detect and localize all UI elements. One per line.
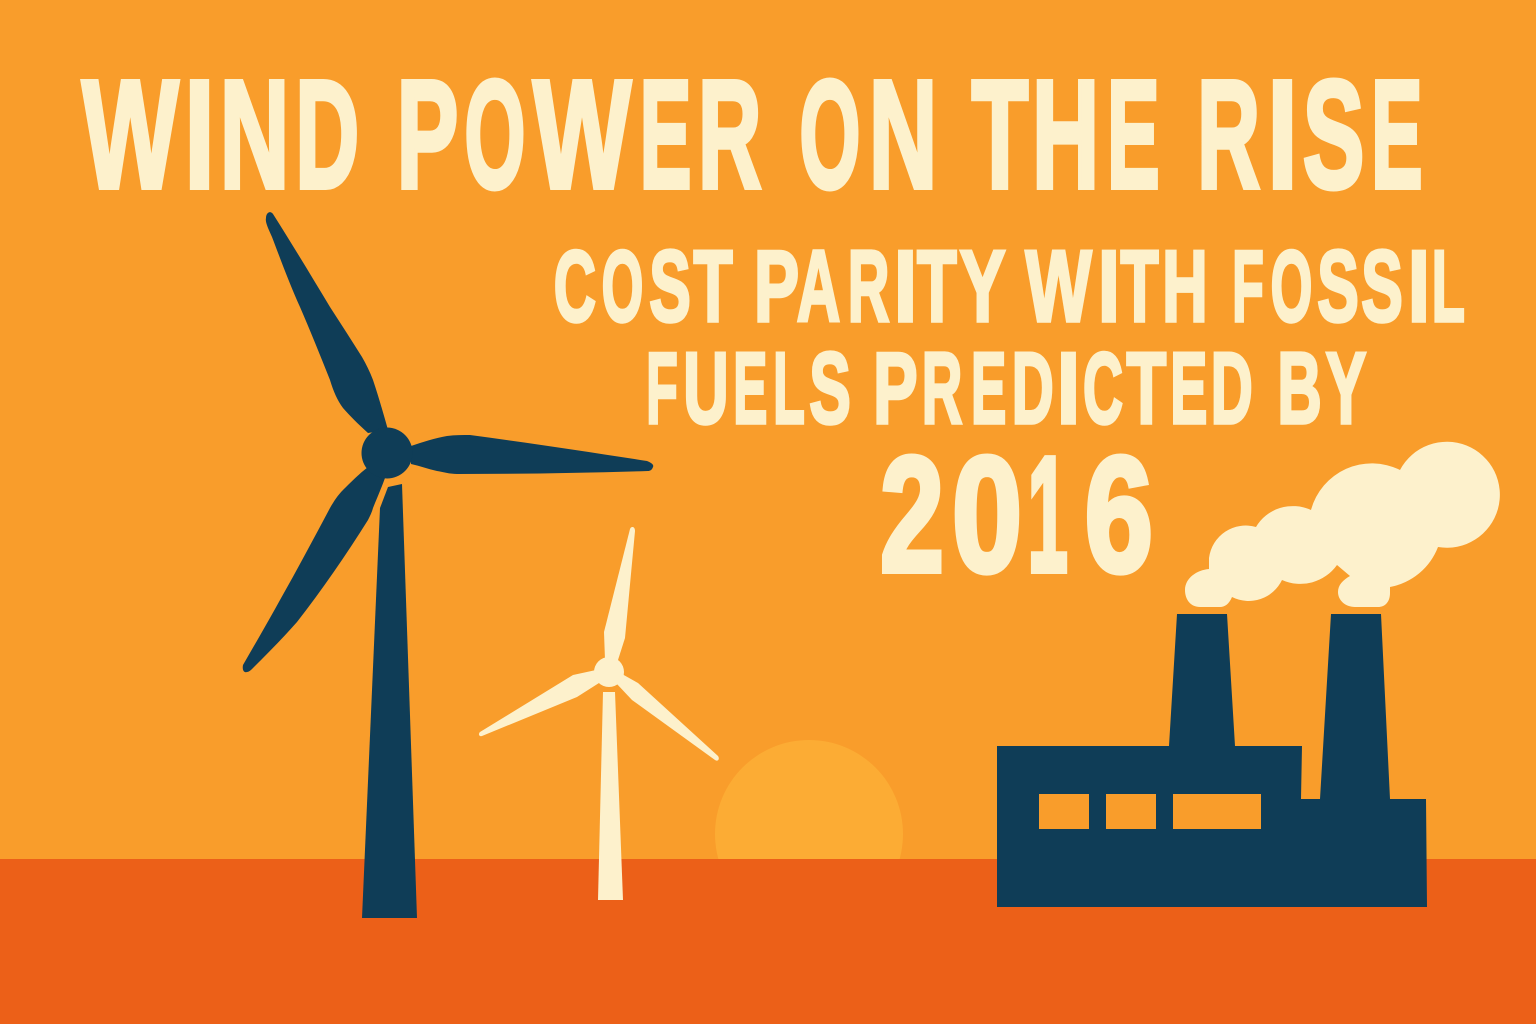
subtitle: A [797,231,840,343]
subtitle: C [554,231,596,343]
subtitle: B [1277,333,1322,445]
title: E [640,48,692,220]
subtitle: Y [960,231,1005,343]
subtitle: I [1408,231,1430,343]
title: I [1267,48,1298,220]
subtitle: F [1232,231,1264,343]
title: R [698,48,762,220]
subtitle: P [873,333,918,445]
title: E [1107,48,1160,220]
title: R [1197,48,1260,220]
title: E [1371,48,1423,220]
subtitle: T [694,231,733,343]
large navy wind turbine [243,212,653,918]
small cream wind turbine [479,527,719,900]
subtitle: L [773,333,805,445]
factory [997,614,1427,907]
subtitle: T [917,231,957,343]
title: S [1303,48,1364,220]
sun [715,740,903,928]
title: D [295,48,359,220]
year 2016: 1 [1028,423,1068,606]
subtitle [554,231,1465,445]
subtitle: I [1098,231,1120,343]
year 2016: 2 [880,423,944,606]
title: I [184,48,215,220]
subtitle: O [1271,231,1312,343]
factory windows [1039,794,1261,829]
subtitle: P [754,231,799,343]
subtitle: S [1317,231,1359,343]
title: N [869,48,937,220]
subtitle: E [1170,333,1207,445]
title: O [799,48,860,220]
subtitle: H [1162,231,1208,343]
subtitle: E [971,333,1006,445]
title: H [1032,48,1099,220]
title: T [972,48,1028,220]
subtitle: S [649,231,691,343]
title: W [82,48,179,220]
subtitle: S [1361,231,1403,343]
subtitle: R [922,333,962,445]
subtitle: S [809,333,851,445]
year 2016: 0 [952,423,1022,606]
subtitle: I [894,231,917,343]
title: O [464,48,526,220]
subtitle: E [733,333,767,445]
title: P [397,48,458,220]
subtitle: U [683,333,729,445]
smoke cloud [1185,442,1500,607]
subtitle: I [1057,333,1080,445]
subtitle: W [1026,231,1092,343]
title: W [533,48,631,220]
subtitle: R [848,231,889,343]
title: N [220,48,289,220]
ground [0,859,1536,1024]
subtitle: C [1083,333,1123,445]
subtitle: O [602,231,643,343]
subtitle: D [1012,333,1054,445]
subtitle: T [1126,333,1166,445]
subtitle: D [1211,333,1253,445]
subtitle: Y [1326,333,1366,445]
subtitle: F [646,333,678,445]
subtitle: L [1432,231,1465,343]
subtitle: T [1120,231,1159,343]
year 2016: 6 [1085,423,1153,606]
